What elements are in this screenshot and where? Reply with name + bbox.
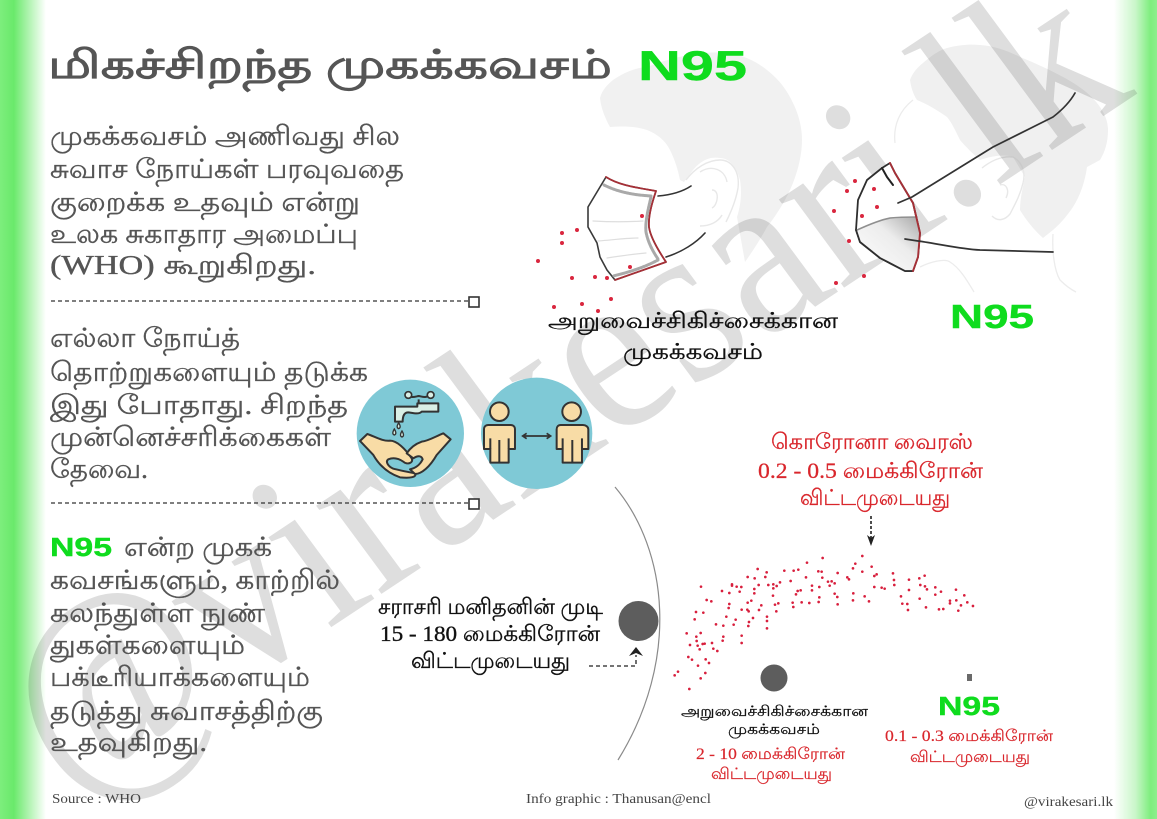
footer: source: Source : WHO <box>52 792 141 807</box>
person left <box>484 402 515 463</box>
text block: human hair size: 15 - 180 மைக்கிரோன் <box>380 621 601 646</box>
text block: N95 benefit: தடுத்து சுவாசத்திற்கு <box>50 696 323 729</box>
text block: WHO statement <box>50 121 404 282</box>
label: N95 particle: விட்டமுடையது <box>910 749 1030 767</box>
label: surgical mask particle: முகக்கவசம் <box>728 722 820 738</box>
text block: not sufficient <box>50 323 368 487</box>
text block: N95 benefit: பக்டீரியாக்களையும் <box>50 662 310 692</box>
label: N95 particle: 0.1 - 0.3 மைக்கிரோன் <box>885 728 1054 745</box>
caption: surgical mask: முகக்கவசம் <box>623 339 763 366</box>
text block: N95 benefit: உதவுகிறது. <box>50 727 207 760</box>
text block: not sufficient: எல்லா நோய்த் <box>50 323 240 356</box>
surgical mask illustration <box>588 177 705 280</box>
text block: WHO statement: உலக சுகாதார அமைப்பு <box>50 219 358 252</box>
arc: magnified circle edge <box>615 487 660 760</box>
arrow: hair pointer <box>589 647 643 666</box>
footer: handle: @virakesari.lk <box>1024 795 1113 810</box>
text block: N95 benefit <box>50 532 340 760</box>
mask ear straps <box>658 186 705 257</box>
caption: surgical mask <box>548 308 839 366</box>
hair size dot <box>618 601 658 641</box>
label: surgical mask particle: விட்டமுடையது <box>711 766 832 784</box>
right neck outline <box>895 100 1076 292</box>
left green edge band <box>0 0 46 819</box>
chart: virus particle scatter <box>675 556 973 689</box>
N95 particle dot <box>967 674 972 681</box>
left ear outline <box>686 160 738 226</box>
callout: coronavirus size: விட்டமுடையது <box>800 485 950 512</box>
text block: WHO statement: சுவாச நோய்கள் பரவுவதை <box>50 154 404 187</box>
label: surgical mask particle: 2 - 10 மைக்கிரோன் <box>696 746 846 763</box>
N95 mask droplets <box>834 181 877 283</box>
icon: physical distancing <box>481 378 592 489</box>
callout: coronavirus size <box>758 429 984 512</box>
head silhouette: right <box>895 45 1108 292</box>
head silhouette: left <box>600 52 802 262</box>
text block: not sufficient: தேவை. <box>50 454 148 487</box>
text block: WHO statement: முகக்கவசம் அணிவது சில <box>50 121 400 153</box>
title <box>48 42 747 92</box>
text block: not sufficient: முன்னெச்சரிக்கைகள் <box>50 422 332 454</box>
text block: WHO statement: குறைக்க உதவும் என்று <box>50 187 360 220</box>
N95 mask illustration <box>856 93 1075 271</box>
text block: not sufficient: தொற்றுகளையும் தடுக்க <box>50 357 368 390</box>
text block: N95 benefit: கவசங்களும், காற்றில் <box>50 565 340 598</box>
surgical mask droplets <box>538 216 642 311</box>
text block: N95 benefit: N95 <box>50 532 112 562</box>
text block: N95 benefit: கலந்துள்ள நுண் <box>50 598 266 631</box>
right ear outline <box>982 157 1024 220</box>
text block: human hair size: சராசரி மனிதனின் முடி <box>378 594 603 621</box>
callout: coronavirus size: கொரோனா வைரஸ் <box>771 429 973 454</box>
title N95: N95 <box>638 42 747 89</box>
text block: not sufficient: இது போதாது. சிறந்த <box>50 390 348 423</box>
person right <box>557 402 588 463</box>
text block: N95 benefit: என்ற முகக் <box>124 532 272 564</box>
label: surgical mask particle: அறுவைச்சிகிச்சைக்கான <box>681 704 869 720</box>
N95 straps <box>898 93 1075 252</box>
arrow between people <box>523 433 551 439</box>
caption: N95: N95 <box>950 298 1034 335</box>
surgical mask particle dot <box>760 664 788 692</box>
footer: credit: Info graphic : Thanusan@encl <box>526 792 711 807</box>
right green edge band <box>1114 0 1157 819</box>
label: N95 particle: N95 <box>938 691 1000 721</box>
arrow: coronavirus pointer <box>867 516 875 546</box>
label: N95 particle <box>885 691 1054 767</box>
text block: WHO statement: (WHO) கூறுகிறது. <box>50 250 316 282</box>
text block: human hair size <box>378 594 603 675</box>
label: surgical mask particle <box>681 704 869 784</box>
icon: hand washing <box>357 380 464 487</box>
callout: coronavirus size: 0.2 - 0.5 மைக்கிரோன் <box>758 458 984 483</box>
caption: surgical mask: அறுவைச்சிகிச்சைக்கான <box>548 308 839 335</box>
text block: N95 benefit: துகள்களையும் <box>50 630 245 662</box>
title: மிகச்சிறந்த முகக்கவசம் <box>48 42 612 92</box>
text block: human hair size: விட்டமுடையது <box>411 648 570 675</box>
